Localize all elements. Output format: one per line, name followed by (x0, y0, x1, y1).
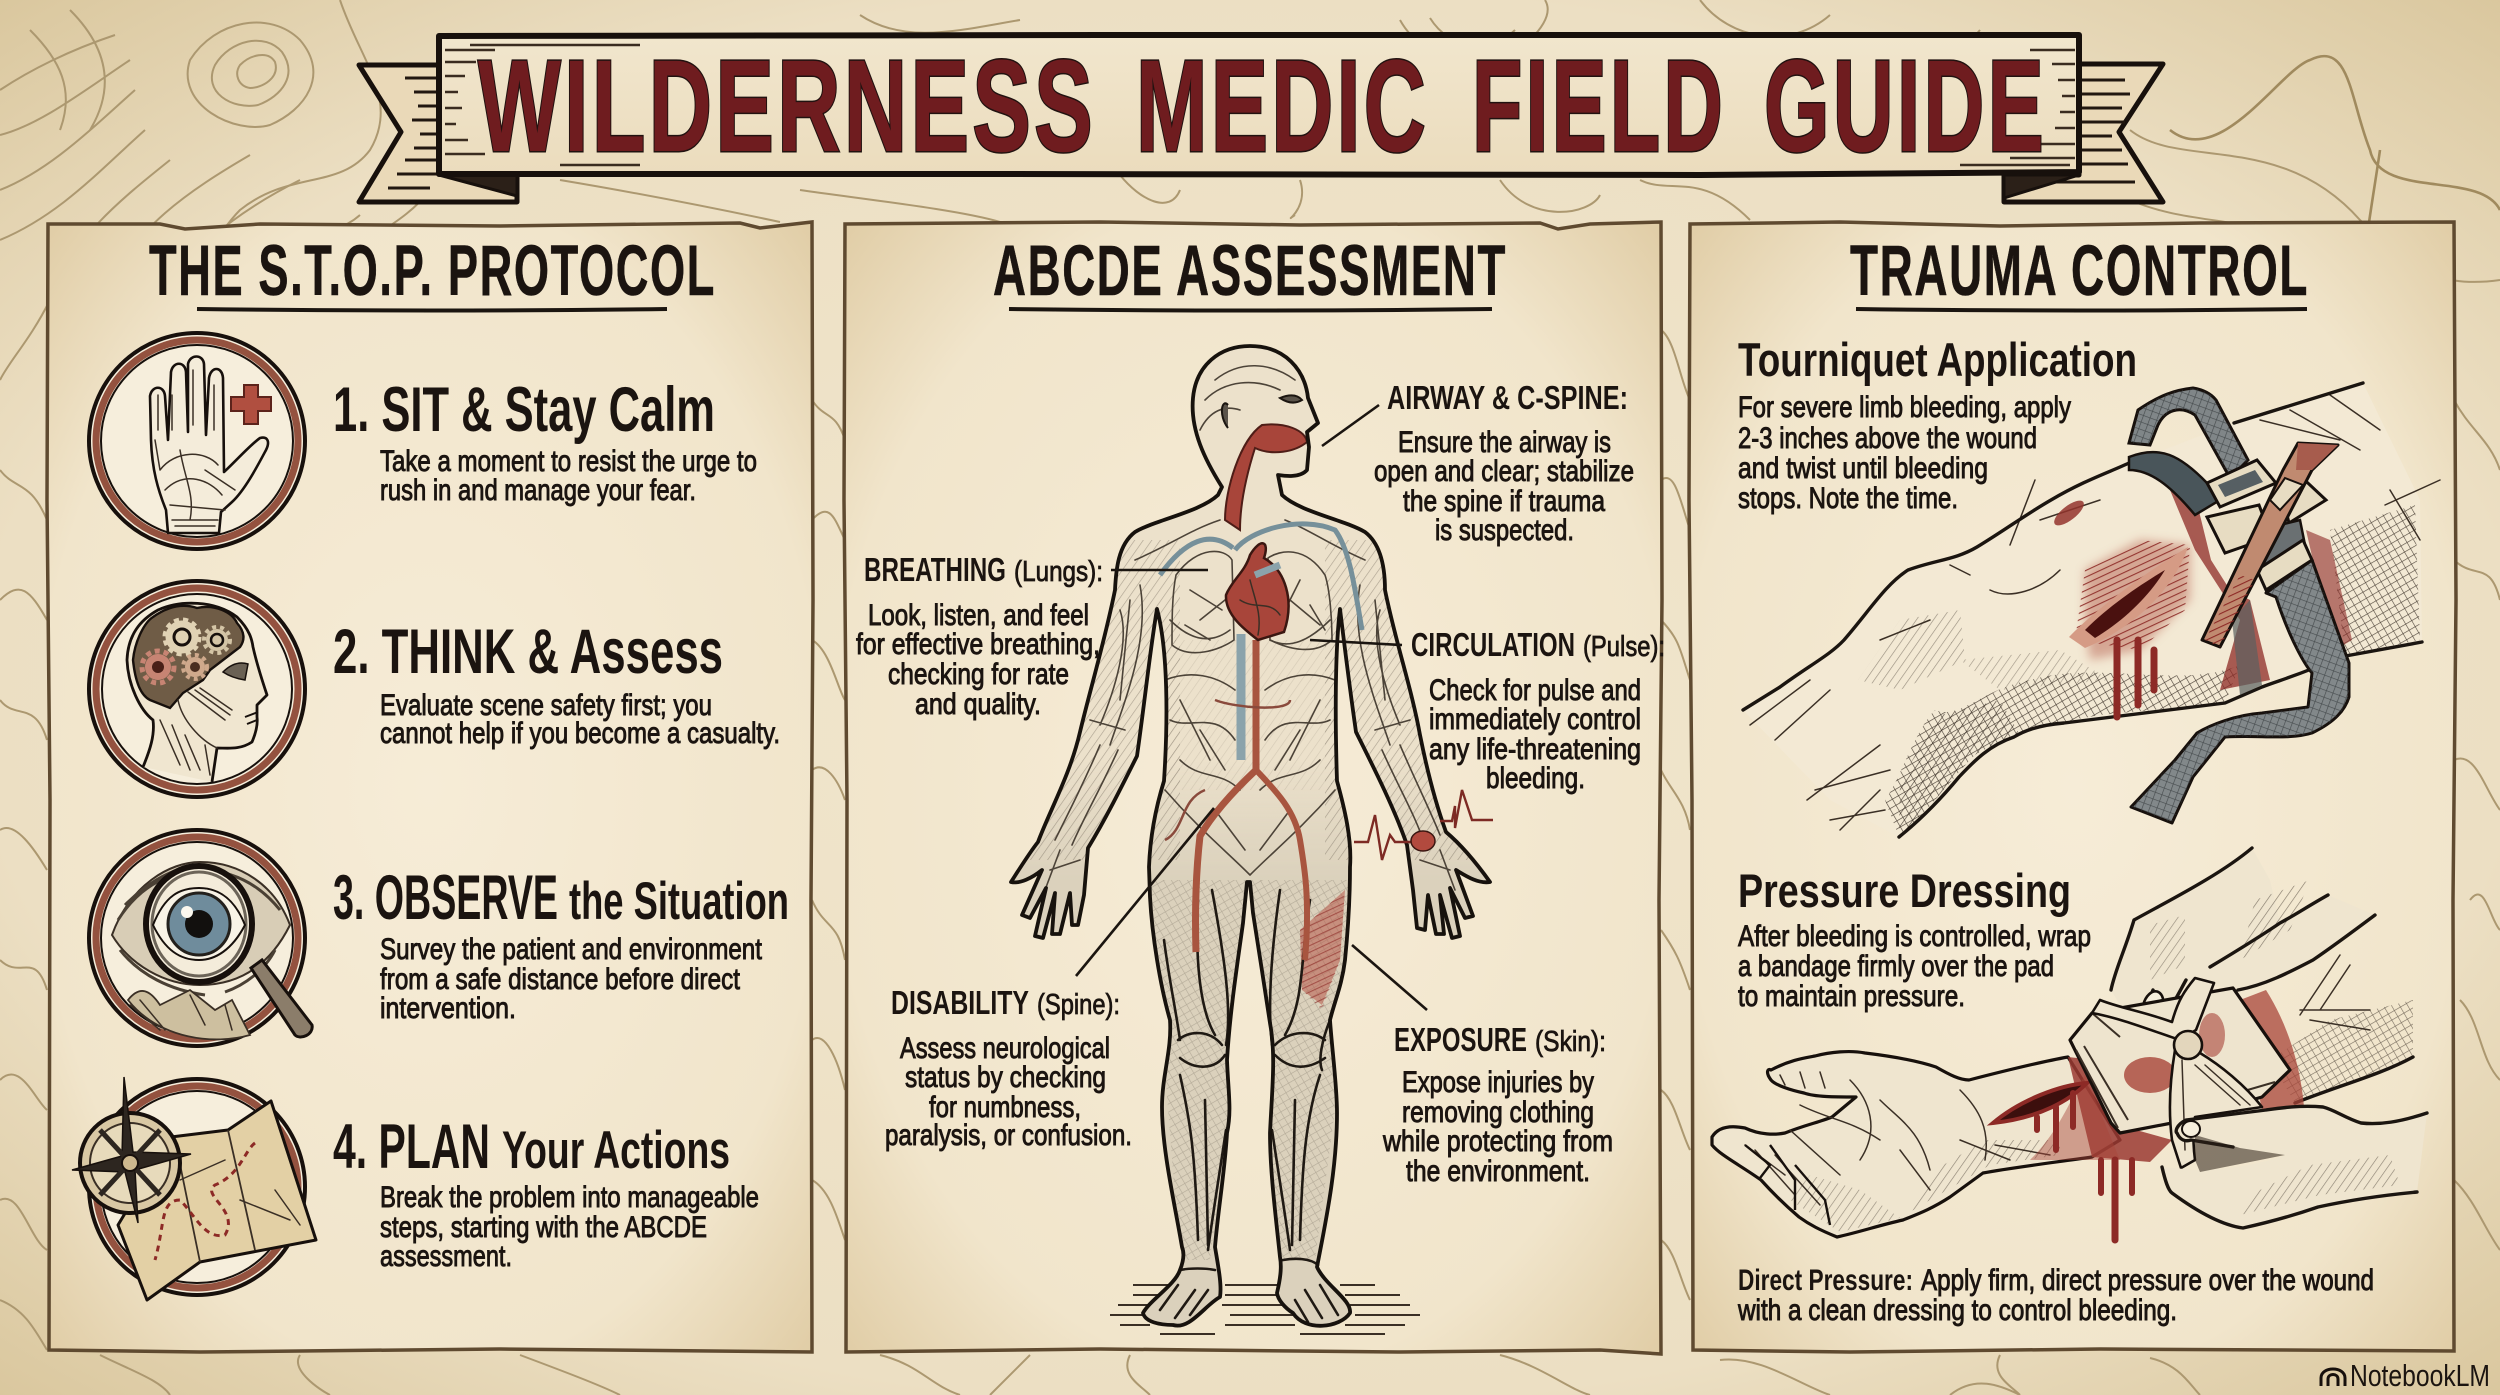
title: FIELD (1472, 32, 1726, 179)
wound and bleeding (2068, 1057, 2172, 1162)
step 3 text (380, 933, 763, 1025)
title banner (359, 32, 2163, 202)
step 3 heading: the Situation (569, 872, 789, 931)
exposure label (1352, 945, 1613, 1188)
tourniquet text: 2-3 inches above the wound (1738, 422, 2037, 455)
pressure dressing text: a bandage firmly over the pad (1738, 950, 2054, 983)
wound and blood (2051, 496, 2087, 530)
title: GUIDE (1764, 32, 2047, 179)
step 4 heading (333, 1112, 730, 1182)
disability label: DISABILITY (891, 984, 1029, 1021)
anatomical body figure (1000, 346, 1505, 1360)
step 3 text: intervention. (380, 992, 516, 1025)
banner left tail (359, 65, 517, 202)
step 2 text: Evaluate scene safety first; you (380, 689, 712, 722)
disability label (885, 808, 1214, 1152)
heading: ABCDE ASSESSMENT (993, 232, 1507, 311)
upper assisting hand (2111, 848, 2375, 1020)
step 1 heading: 1. SIT & Stay Calm (333, 375, 715, 445)
step 3 text: from a safe distance before direct (380, 963, 741, 996)
breathing label: Look, listen, and feel (868, 599, 1089, 632)
airway label (1322, 379, 1634, 547)
disability label: paralysis, or confusion. (885, 1119, 1132, 1152)
circulation label (1310, 626, 1665, 795)
direct pressure note: Direct Pressure: (1738, 1264, 1913, 1297)
exposure label: while protecting from (1382, 1125, 1613, 1158)
pressure dressing text (1738, 920, 2091, 1013)
dressing pad (2070, 988, 2290, 1133)
step 4 heading: 4. PLAN (333, 1112, 490, 1182)
breathing label: for effective breathing, (856, 628, 1100, 661)
disability label: (Spine): (1037, 989, 1120, 1021)
step 4 text: Break the problem into manageable (380, 1181, 759, 1214)
step 4 heading: Your Actions (502, 1121, 730, 1180)
heading: THE S.T.O.P. PROTOCOL (149, 232, 716, 311)
direct pressure note (1737, 1264, 2374, 1327)
circulation label: CIRCULATION (1411, 626, 1575, 663)
step 3 text: Survey the patient and environment (380, 933, 763, 966)
title: MEDIC (1136, 32, 1429, 179)
exposure label: removing clothing (1402, 1096, 1594, 1129)
tourniquet heading: Tourniquet Application (1738, 333, 2137, 386)
airway label: AIRWAY & C-SPINE: (1387, 379, 1628, 416)
panel: the S.T.O.P. protocol (47, 222, 813, 1352)
step 4 icon: compass and map (72, 1077, 316, 1300)
far forearm (2270, 1000, 2413, 1103)
tourniquet text: and twist until bleeding (1738, 452, 1988, 485)
step 4 text: steps, starting with the ABCDE (380, 1211, 707, 1244)
pressure dressing illustration (1712, 848, 2427, 1240)
lower assisting hand (2162, 1106, 2427, 1228)
bandage knot and tails (2092, 978, 2214, 1040)
tourniquet text: For severe limb bleeding, apply (1738, 391, 2071, 424)
disability label: Assess neurological (900, 1032, 1110, 1065)
aorta and veins (1160, 524, 1362, 630)
lungs (1172, 551, 1332, 653)
tourniquet text: stops. Note the time. (1738, 482, 1958, 515)
title (478, 32, 2047, 179)
airway (1225, 424, 1307, 530)
step 1 icon: hand and cross (89, 333, 305, 549)
windlass (2202, 443, 2338, 647)
airway label: is suspected. (1435, 514, 1574, 547)
exposure label: the environment. (1406, 1155, 1590, 1188)
step 1 text (380, 445, 757, 507)
ground hatching (1110, 1285, 1420, 1334)
airway label: Ensure the airway is (1398, 426, 1611, 459)
exposure label: EXPOSURE (1394, 1021, 1527, 1058)
circulation label: bleeding. (1486, 762, 1585, 795)
step 4 text (380, 1181, 759, 1273)
breathing label: and quality. (915, 688, 1041, 721)
thigh, knee and calf lines (1160, 890, 1338, 1322)
muscle and vessel lines (1045, 366, 1455, 890)
breathing label: (Lungs): (1014, 556, 1103, 588)
disability label: status by checking (905, 1061, 1106, 1094)
circulation label: any life-threatening (1429, 733, 1641, 766)
title: WILDERNESS (478, 32, 1096, 179)
step 2 icon: head with gears (89, 581, 305, 797)
direct pressure note: with a clean dressing to control bleeding. (1737, 1294, 2177, 1327)
pressure dressing text: to maintain pressure. (1738, 980, 1965, 1013)
airway label: the spine if trauma (1403, 485, 1605, 518)
tourniquet text (1738, 391, 2071, 515)
step 1 text: rush in and manage your fear. (380, 474, 696, 507)
exposure label: Expose injuries by (1402, 1066, 1594, 1099)
breathing label: checking for rate (888, 658, 1069, 691)
step 2 text: cannot help if you become a casualty. (380, 717, 780, 750)
hatching on forearm (1885, 665, 2240, 837)
banner body (439, 35, 2079, 175)
breathing label: BREATHING (864, 551, 1006, 588)
banner right tail (2004, 64, 2163, 202)
exposure label: (Skin): (1535, 1026, 1606, 1058)
circulation label: immediately control (1429, 703, 1641, 736)
step 1 text: Take a moment to resist the urge to (380, 445, 757, 478)
circulation label: Check for pulse and (1429, 674, 1641, 707)
heart (1226, 543, 1289, 640)
step 2 heading: 2. THINK & Assess (333, 617, 723, 687)
buckles (2207, 460, 2276, 507)
tourniquet illustration (1743, 383, 2440, 837)
breathing label (856, 551, 1208, 721)
airway label: open and clear; stabilize (1374, 455, 1634, 488)
step 3 heading: 3. OBSERVE (333, 863, 558, 933)
strap (2129, 452, 2220, 515)
step 4 text: assessment. (380, 1240, 512, 1273)
direct pressure note: Apply firm, direct pressure over the wound (1921, 1264, 2374, 1297)
pressure dressing heading: Pressure Dressing (1738, 864, 2071, 917)
panel: trauma control (1689, 222, 2456, 1352)
step 2 text (380, 689, 780, 750)
pulse trace at wrist (1354, 815, 1412, 860)
pressure dressing text: After bleeding is controlled, wrap (1738, 920, 2091, 953)
lower injured hand and forearm (1712, 1052, 2120, 1237)
panel: ABCDE assessment (844, 222, 1665, 1360)
circulation label: (Pulse): (1583, 631, 1665, 663)
step 3 icon: eye and magnifying glass (89, 830, 312, 1046)
disability label: for numbness, (929, 1091, 1081, 1124)
